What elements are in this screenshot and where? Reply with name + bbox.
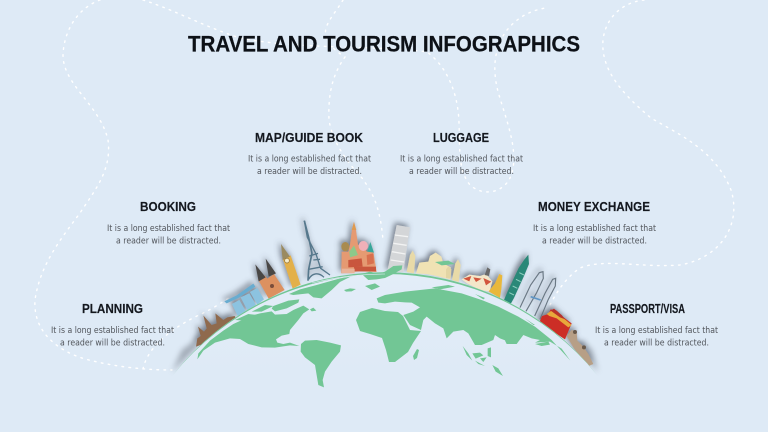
text block: luggage: LUGGAGE [433, 131, 489, 145]
rim highlight [312, 274, 385, 283]
landmark: tiananmen gate [539, 309, 572, 339]
text block: planning: It is a long established fact that [51, 326, 174, 336]
text block: money exchange: MONEY EXCHANGE [538, 200, 650, 214]
text block: planning: a reader will be distracted. [60, 338, 165, 348]
landmark: colourful temple [462, 267, 502, 298]
text block: money exchange: a reader will be distracted. [542, 236, 647, 246]
globe end shadows [172, 340, 598, 372]
text block: booking: a reader will be distracted. [116, 236, 221, 246]
landmark: saint basil's cathedral [341, 222, 377, 273]
eurasia [377, 288, 570, 361]
landmark: taipei 101 [504, 255, 529, 304]
arctic islands [235, 288, 356, 321]
text block: passport/visa [595, 302, 718, 348]
scandinavia and uk [362, 261, 455, 290]
text block: map/guide book: a reader will be distracted. [257, 167, 362, 177]
text block: money exchange: It is a long established fact that [533, 224, 656, 234]
text block: booking: BOOKING [140, 200, 196, 214]
text block: luggage [400, 131, 523, 177]
text block: passport/visa: a reader will be distracted. [604, 338, 709, 348]
continents [197, 261, 570, 387]
landmark: petronas towers [520, 272, 556, 319]
madagascar [413, 349, 419, 360]
landmark: eiffel tower [304, 221, 330, 281]
text block: planning [51, 302, 174, 348]
text block: map/guide book: MAP/GUIDE BOOK [255, 131, 363, 145]
landmark: leaning tower of pisa [387, 225, 410, 272]
north america [197, 306, 309, 359]
landmarks right [387, 225, 593, 366]
landmarks left [196, 221, 377, 347]
south america [301, 340, 341, 387]
landmark: marina bay sands [224, 284, 264, 318]
greenland [289, 277, 351, 298]
globe [173, 261, 597, 387]
text block: booking [107, 200, 230, 246]
landmark: great wall [567, 330, 593, 366]
text block: passport/visa: PASSPORT/VISA [610, 302, 685, 316]
globe rim [173, 272, 597, 375]
landmark: angkor wat [196, 313, 237, 347]
landmark: big ben [281, 244, 301, 289]
text block: map/guide book [248, 131, 371, 177]
landmark: old church [255, 259, 285, 299]
text block: booking: It is a long established fact that [107, 224, 230, 234]
africa and middle east [356, 308, 421, 362]
globe ocean [173, 272, 597, 378]
islands [432, 285, 550, 376]
dotted travel routes [35, 0, 734, 370]
text block: luggage: It is a long established fact that [400, 154, 523, 164]
landmark: taj mahal [407, 251, 461, 282]
text block: map/guide book: It is a long established fact that [248, 154, 371, 164]
text block: luggage: a reader will be distracted. [409, 167, 514, 177]
text block: money exchange [533, 200, 656, 246]
title: TRAVEL AND TOURISM INFOGRAPHICS [188, 32, 580, 56]
text block: planning: PLANNING [82, 302, 143, 316]
text block: passport/visa: It is a long established fact that [595, 326, 718, 336]
